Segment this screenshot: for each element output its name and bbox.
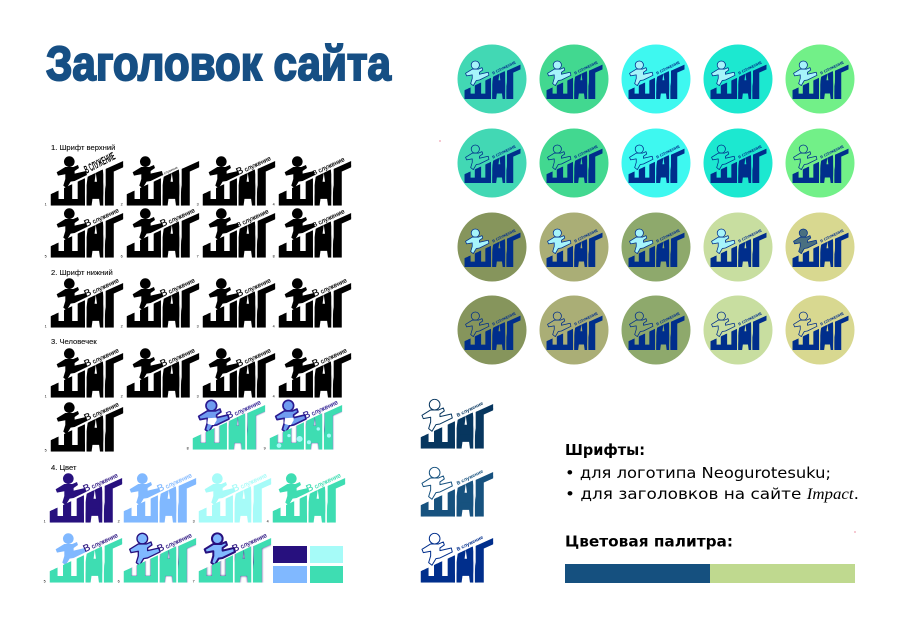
logo 4: А (312, 324, 336, 420)
logo 2: А (160, 324, 184, 420)
logo steel blue: Г (473, 452, 500, 539)
badge row 1 col 3: Ш (627, 59, 656, 113)
badge row 2 col 4 (704, 126, 772, 201)
logo 3: 3 (197, 325, 199, 329)
logo 4: В служение (312, 156, 346, 177)
badge row 2 col 5: Ш (791, 143, 820, 197)
text block: fonts (565, 441, 859, 503)
badge row 4 col 4: Г (751, 301, 772, 367)
logo 7 (192, 532, 272, 583)
logo 5: 5 (45, 449, 47, 453)
logo royal blue (419, 509, 500, 605)
logo 3: 3 (197, 395, 199, 399)
font line: headings: • для заголовков на сайте Impact. (565, 485, 859, 503)
badge row 3 col 5: В СЛУЖЕНИЕ (820, 228, 845, 243)
logo 2: Г (179, 141, 206, 228)
logo 8: 8 (273, 255, 275, 259)
logo 2: 2 (121, 203, 123, 207)
logo 5 (44, 208, 124, 258)
badge row 2 col 5: Г (833, 134, 854, 200)
logo 5: В служение (83, 204, 121, 230)
logo 6: Ш (125, 205, 163, 276)
logo 4: А (306, 449, 330, 545)
logo 5: В служение (83, 398, 121, 424)
logo 9 outlined teal with bubbles: Г (322, 385, 349, 472)
logo dark navy: Г (473, 384, 500, 471)
logo 6: 6 (121, 255, 123, 259)
font line: logo: • для логотипа Neogurotesuku; (565, 464, 831, 482)
logo 2: 2 (121, 325, 123, 329)
logo 6: Г (176, 518, 203, 605)
badge row 1 col 5: Ш (791, 59, 820, 113)
logo 2: Г (176, 458, 203, 545)
logo 1: Г (103, 263, 130, 350)
logo 4: 4 (273, 325, 275, 329)
logo 6 (120, 208, 200, 258)
logo 8: Г (331, 193, 358, 280)
badge row 2 col 2: В СЛУЖЕНИЕ (574, 144, 599, 159)
badge row 2 col 3: Ш (627, 143, 656, 197)
logo 6: 6 (118, 580, 120, 584)
badge row 3 col 2: Ш (545, 227, 574, 281)
logo 1: В служение (83, 274, 121, 300)
badge row 4 col 5: В СЛУЖЕНИЕ (820, 311, 845, 326)
logo 3: 3 (197, 203, 199, 207)
logo 8: А (312, 184, 336, 280)
logo 5: А (83, 509, 107, 605)
heading: 2. Шрифт нижний (51, 268, 113, 277)
badge row 3 col 1: Ш (463, 227, 492, 281)
logo 2: Ш (122, 470, 160, 541)
logo 7: 7 (193, 580, 195, 584)
badge row 1 col 3 (622, 42, 690, 117)
badge row 1 col 1: Г (505, 50, 526, 116)
logo 1: А (84, 254, 108, 350)
logo 6: А (160, 184, 184, 280)
logo 4 (272, 156, 352, 206)
logo 7: А (236, 184, 260, 280)
logo 2: в служение (161, 165, 178, 177)
logo 3: В служение (235, 152, 273, 178)
badge row 3 col 2: А (572, 210, 591, 285)
badge row 3 col 5: А (818, 210, 837, 285)
badge row 2 col 1: Ш (463, 143, 492, 197)
badge row 4 col 1 (458, 293, 526, 368)
logo 8 outlined teal: Г (245, 385, 272, 472)
badge row 3 col 4 (704, 210, 772, 285)
badge row 3 col 3: А (654, 210, 673, 285)
badge row 4 col 3: Ш (627, 310, 656, 364)
logo 6: В служение (159, 204, 197, 230)
logo 3 (196, 348, 276, 398)
badge row 2 col 1: А (490, 126, 509, 201)
logo 4: 4 (273, 203, 275, 207)
logo 5: 5 (45, 255, 47, 259)
logo 4: Ш (271, 470, 309, 541)
logo 1 (44, 152, 124, 206)
badge row 2 col 5 (786, 126, 854, 201)
palette swatches (273, 546, 343, 583)
logo 5 (44, 533, 122, 583)
logo 3 (196, 156, 276, 206)
logo dark navy: Ш (419, 396, 457, 467)
logo 4: А (312, 254, 336, 350)
heading: 3. Человечек (51, 337, 97, 346)
logo 4: В служение (311, 274, 349, 300)
badge row 1 col 3: В СЛУЖЕНИЕ (656, 60, 681, 75)
logo 5: 5 (44, 580, 46, 584)
logo 3: Ш (197, 470, 235, 541)
badge row 2 col 1 (458, 126, 526, 201)
logo 7: А (232, 509, 256, 605)
logo 1 (44, 473, 122, 523)
logo 4: Ш (277, 275, 315, 346)
logo 3: Ш (201, 275, 239, 346)
logo 5: Ш (48, 530, 86, 601)
logo 7: Ш (197, 530, 235, 601)
badge row 4 col 2: Ш (545, 310, 574, 364)
logo 9 outlined teal with bubbles: В служение (302, 396, 340, 422)
logo 1: Ш (49, 345, 87, 416)
badge row 1 col 5 (786, 42, 854, 117)
badge row 4 col 4: В СЛУЖЕНИЕ (738, 311, 763, 326)
logo 8 outlined teal: В служение (225, 396, 263, 422)
logo 1: А (84, 324, 108, 420)
badge row 2 col 1: В СЛУЖЕНИЕ (492, 144, 517, 159)
badge row 3 col 5: Г (833, 218, 854, 284)
logo 4: Г (331, 263, 358, 350)
badge row 3 col 4: Ш (709, 227, 738, 281)
badge row 4 col 5 (786, 293, 854, 368)
badge row 2 col 4: А (736, 126, 755, 201)
badge row 4 col 3: Г (669, 301, 690, 367)
logo 3: Г (255, 141, 282, 228)
badge row 3 col 1: В СЛУЖЕНИЕ (492, 228, 517, 243)
badge row 4 col 4 (704, 293, 772, 368)
logo 7: В служение (236, 208, 270, 229)
logo dark navy: А (454, 375, 478, 471)
badge row 2 col 2: А (572, 126, 591, 201)
badge row 4 col 5: Г (833, 301, 854, 367)
badge row 4 col 2 (540, 293, 608, 368)
logo 5: Г (103, 193, 130, 280)
logo 8: Ш (277, 205, 315, 276)
logo 2 (120, 348, 200, 398)
logo 3: А (236, 254, 260, 350)
heading: fonts: Шрифты: (565, 441, 645, 459)
badge row 1 col 5: Г (833, 50, 854, 116)
badge row 2 col 1: Г (505, 134, 526, 200)
panel: figure variants (44, 339, 352, 452)
logo steel blue: А (454, 443, 478, 539)
badge row 4 col 1: А (490, 293, 509, 368)
logo 2: В служение (156, 469, 194, 495)
logo 1: 1 (44, 520, 46, 524)
logo 3: В служение (235, 274, 273, 300)
logo 1: А (83, 449, 107, 545)
badge row 4 col 3 (622, 293, 690, 368)
logo 8: В служение (312, 208, 346, 229)
logo 7: 7 (197, 255, 199, 259)
logo 4: 4 (267, 520, 269, 524)
logo 1: Г (103, 141, 130, 228)
heading: palette: Цветовая палитра: (565, 532, 733, 550)
badge row 1 col 1: Ш (463, 59, 492, 113)
badge row 3 col 2 (540, 210, 608, 285)
logo 3 (196, 278, 276, 328)
badge row 2 col 4: Г (751, 134, 772, 200)
badge row 1 col 2: Ш (545, 59, 574, 113)
panel: blue logo versions (419, 375, 500, 605)
badge row 1 col 1: В СЛУЖЕНИЕ (492, 60, 517, 75)
logo 2: Ш (125, 275, 163, 346)
badge row 2 col 2 (540, 126, 608, 201)
badge row 1 col 4 (704, 42, 772, 117)
badge row 4 col 5: Ш (791, 310, 820, 364)
badge row 1 col 2 (540, 42, 608, 117)
logo 9 outlined teal with bubbles: А (303, 376, 327, 472)
badge row 3 col 1: А (490, 210, 509, 285)
logo 6: В служение (156, 529, 194, 555)
logo 3: А (236, 132, 260, 228)
logo 1: Ш (49, 275, 87, 346)
badge row 4 col 3: В СЛУЖЕНИЕ (656, 311, 681, 326)
logo 7: Г (255, 193, 282, 280)
badge row 4 col 1: Ш (463, 310, 492, 364)
badge row 4 col 3: А (654, 293, 673, 368)
logo 3: В служение (231, 469, 269, 495)
badge row 2 col 4: Ш (709, 143, 738, 197)
logo 4: Г (331, 333, 358, 420)
logo 3: В служение (235, 344, 273, 370)
logo 1: Ш (48, 470, 86, 541)
logo 4: В служение (305, 469, 343, 495)
logo 6: А (157, 509, 181, 605)
logo 4 (272, 348, 352, 398)
logo 1: В СЛУЖЕНИЕ (82, 149, 117, 176)
logo 4 (272, 278, 352, 328)
logo 1 (44, 348, 124, 398)
badge row 4 col 4: Ш (709, 310, 738, 364)
logo 2: 2 (121, 395, 123, 399)
logo 1: Г (102, 458, 129, 545)
badge row 4 col 1: Г (505, 301, 526, 367)
logo royal blue: В служение (456, 535, 485, 553)
badge row 3 col 4: В СЛУЖЕНИЕ (738, 228, 763, 243)
logo 6: Ш (122, 530, 160, 601)
logo 3: А (236, 324, 260, 420)
badge row 4 col 5: А (818, 293, 837, 368)
logo 4: Г (325, 458, 352, 545)
logo 5: Г (102, 518, 129, 605)
badge row 1 col 5: В СЛУЖЕНИЕ (820, 60, 845, 75)
badge row 4 col 2: В СЛУЖЕНИЕ (574, 311, 599, 326)
logo royal blue: Г (473, 518, 500, 605)
logo 4: Г (331, 141, 358, 228)
logo 2: Г (179, 263, 206, 350)
logo dark navy: В служение (456, 401, 485, 419)
badge row 3 col 3: Г (669, 218, 690, 284)
logo 1: 1 (45, 325, 47, 329)
badge row 3 col 3: В СЛУЖЕНИЕ (656, 228, 681, 243)
badge row 3 col 2: Г (587, 218, 608, 284)
logo 8 outlined teal: А (226, 376, 250, 472)
logo 2: А (160, 254, 184, 350)
logo 8 outlined teal (186, 400, 266, 450)
badge row 2 col 4: В СЛУЖЕНИЕ (738, 144, 763, 159)
badge row 3 col 5: Ш (791, 227, 820, 281)
logo 5: В служение (82, 529, 120, 555)
panel: lower font variants (44, 270, 352, 328)
logo 3: Ш (201, 153, 239, 224)
logo 7: Ш (201, 205, 239, 276)
logo 6 (118, 532, 196, 583)
logo 2: В служение (159, 274, 197, 300)
logo 1: Г (103, 333, 130, 420)
logo 1: В служение (83, 344, 121, 370)
logo 3: Г (255, 333, 282, 420)
logo 9 outlined teal with bubbles: Ш (268, 397, 306, 468)
logo 2: Ш (125, 345, 163, 416)
logo 3: 3 (193, 520, 195, 524)
logo 4: А (312, 132, 336, 228)
badge row 3 col 3 (622, 210, 690, 285)
logo 8 outlined teal: Ш (191, 397, 229, 468)
badge row 3 col 5 (786, 210, 854, 285)
logo royal blue: А (454, 509, 478, 605)
badge row 1 col 4: В СЛУЖЕНИЕ (738, 60, 763, 75)
logo 2: А (157, 449, 181, 545)
logo steel blue: Ш (419, 464, 457, 535)
heading: 1. Шрифт верхний (51, 143, 115, 152)
badge row 2 col 3: В СЛУЖЕНИЕ (656, 144, 681, 159)
logo steel blue: В служение (456, 469, 485, 487)
logo 1: 1 (45, 203, 47, 207)
logo 4: В служение (311, 344, 349, 370)
badge row 2 col 2: Ш (545, 143, 574, 197)
logo 7: В служение (231, 529, 269, 555)
stray dots (439, 140, 856, 533)
badge row 1 col 3: Г (669, 50, 690, 116)
logo steel blue (419, 443, 500, 539)
badge row 1 col 1: А (490, 42, 509, 117)
logo 2 (120, 278, 200, 328)
badge row 1 col 3: А (654, 42, 673, 117)
badge row 3 col 4: Г (751, 218, 772, 284)
logo 4: Ш (277, 345, 315, 416)
logo 2: В служение (159, 344, 197, 370)
badge row 1 col 2: А (572, 42, 591, 117)
logo 3: Г (251, 458, 278, 545)
logo 7 (196, 208, 276, 258)
badge row 1 col 1 (458, 42, 526, 117)
logo 3: Г (255, 263, 282, 350)
colour palette bar (565, 564, 855, 583)
logo 1: 1 (45, 395, 47, 399)
badge row 2 col 3: Г (669, 134, 690, 200)
badge row 3 col 4: А (736, 210, 755, 285)
badge row 3 col 1: Г (505, 218, 526, 284)
badge row 2 col 2: Г (587, 134, 608, 200)
badge row 3 col 2: В СЛУЖЕНИЕ (574, 228, 599, 243)
logo 7: Г (251, 518, 278, 605)
logo 1: А (84, 132, 108, 228)
logo 2: 2 (118, 520, 120, 524)
title: Заголовок сайта (46, 38, 391, 91)
badge row 4 col 4: А (736, 293, 755, 368)
logo 5 (44, 402, 124, 452)
badge row 1 col 4: А (736, 42, 755, 117)
logo 1: В служение (82, 469, 120, 495)
logo 4: 4 (273, 395, 275, 399)
badge row 2 col 3 (622, 126, 690, 201)
logo 5: Ш (49, 399, 87, 470)
badge row 1 col 2: В СЛУЖЕНИЕ (574, 60, 599, 75)
logo 2: Г (179, 333, 206, 420)
logo 4 (266, 473, 346, 523)
logo 2: Ш (125, 153, 163, 224)
logo 9 outlined teal with bubbles (264, 400, 342, 450)
badge row 1 col 2: Г (587, 50, 608, 116)
badge row 2 col 5: А (818, 126, 837, 201)
panel: round logo badges (458, 42, 854, 368)
logo 2 (120, 156, 200, 206)
badge row 4 col 1: В СЛУЖЕНИЕ (492, 311, 517, 326)
badge row 3 col 3: Ш (627, 227, 656, 281)
logo 3 (192, 473, 272, 523)
logo 5: А (84, 378, 108, 474)
logo 8 (272, 208, 352, 258)
badge row 2 col 3: А (654, 126, 673, 201)
logo 5: А (84, 184, 108, 280)
logo 1: Ш (49, 153, 87, 224)
badge row 4 col 2: А (572, 293, 591, 368)
logo 9 outlined teal with bubbles: 9 (264, 447, 266, 451)
logo 5: Ш (49, 205, 87, 276)
panel: colour variants (44, 465, 346, 583)
logo 2: А (160, 132, 184, 228)
badge row 4 col 2: Г (587, 301, 608, 367)
badge row 1 col 4: Ш (709, 59, 738, 113)
logo dark navy (419, 375, 500, 471)
badge row 1 col 5: А (818, 42, 837, 117)
badge row 1 col 4: Г (751, 50, 772, 116)
logo 6: Г (179, 193, 206, 280)
logo royal blue: Ш (419, 530, 457, 601)
panel: upper font variants (44, 144, 352, 258)
logo 1 (44, 278, 124, 328)
logo 8 outlined teal: 8 (187, 447, 189, 451)
heading: 4. Цвет (51, 463, 77, 472)
badge row 2 col 5: В СЛУЖЕНИЕ (820, 144, 845, 159)
logo 4: Ш (277, 153, 315, 224)
logo 3: Ш (201, 345, 239, 416)
logo 5: Г (103, 387, 130, 474)
badge row 3 col 1 (458, 210, 526, 285)
logo 2 (118, 473, 196, 523)
logo 3: А (232, 449, 256, 545)
